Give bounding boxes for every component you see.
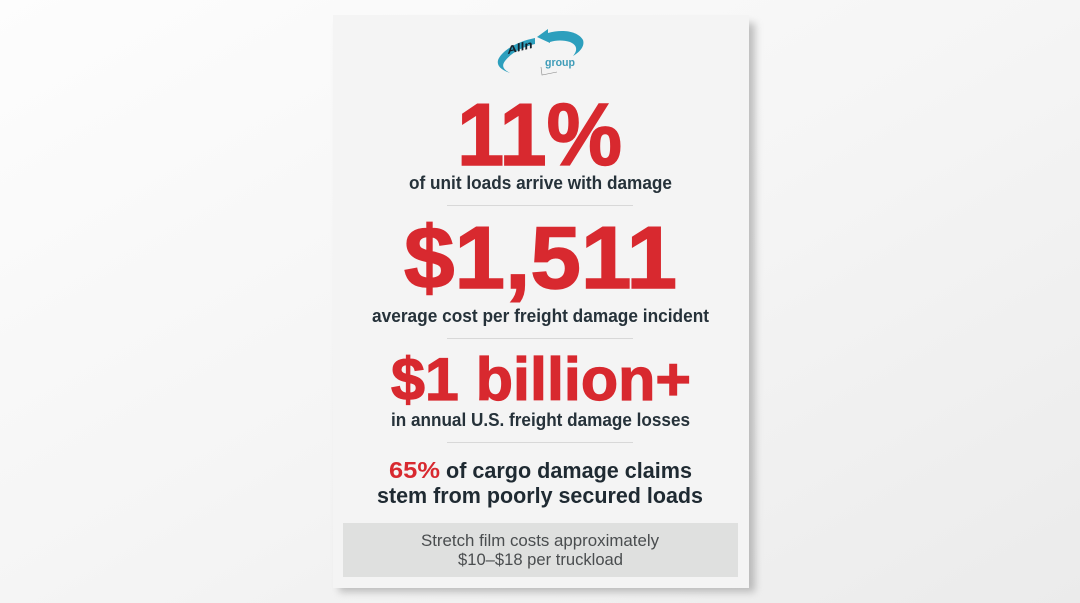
- callout: [343, 523, 738, 577]
- stat: 11%: of unit loads arrive with damage: [409, 173, 672, 193]
- stat: $1,511: $1,511: [404, 208, 677, 307]
- stat: 11%: 11%: [457, 85, 622, 184]
- stat: 65%: stem from poorly secured loads: [377, 483, 703, 508]
- stat: $1,511: average cost per freight damage incident: [372, 306, 709, 326]
- logo: [498, 29, 583, 75]
- callout: Stretch film costs approximately: [421, 531, 659, 550]
- stat: $1,511: [372, 208, 709, 326]
- logo: Alln: [505, 39, 534, 57]
- stat: 11%: [409, 85, 672, 193]
- logo: group: [545, 57, 575, 69]
- callout: $10–$18 per truckload: [458, 550, 623, 569]
- poster shadow: [339, 23, 755, 592]
- stat: $1 billion+: in annual U.S. freight damage losses: [391, 410, 690, 430]
- stat: $1 billion+: $1 billion+: [391, 346, 691, 413]
- stat: 65%: [377, 457, 703, 508]
- stat: 65%: of cargo damage claims: [446, 458, 692, 483]
- stat: 65%: 65%: [389, 457, 440, 483]
- poster panel: [333, 15, 749, 588]
